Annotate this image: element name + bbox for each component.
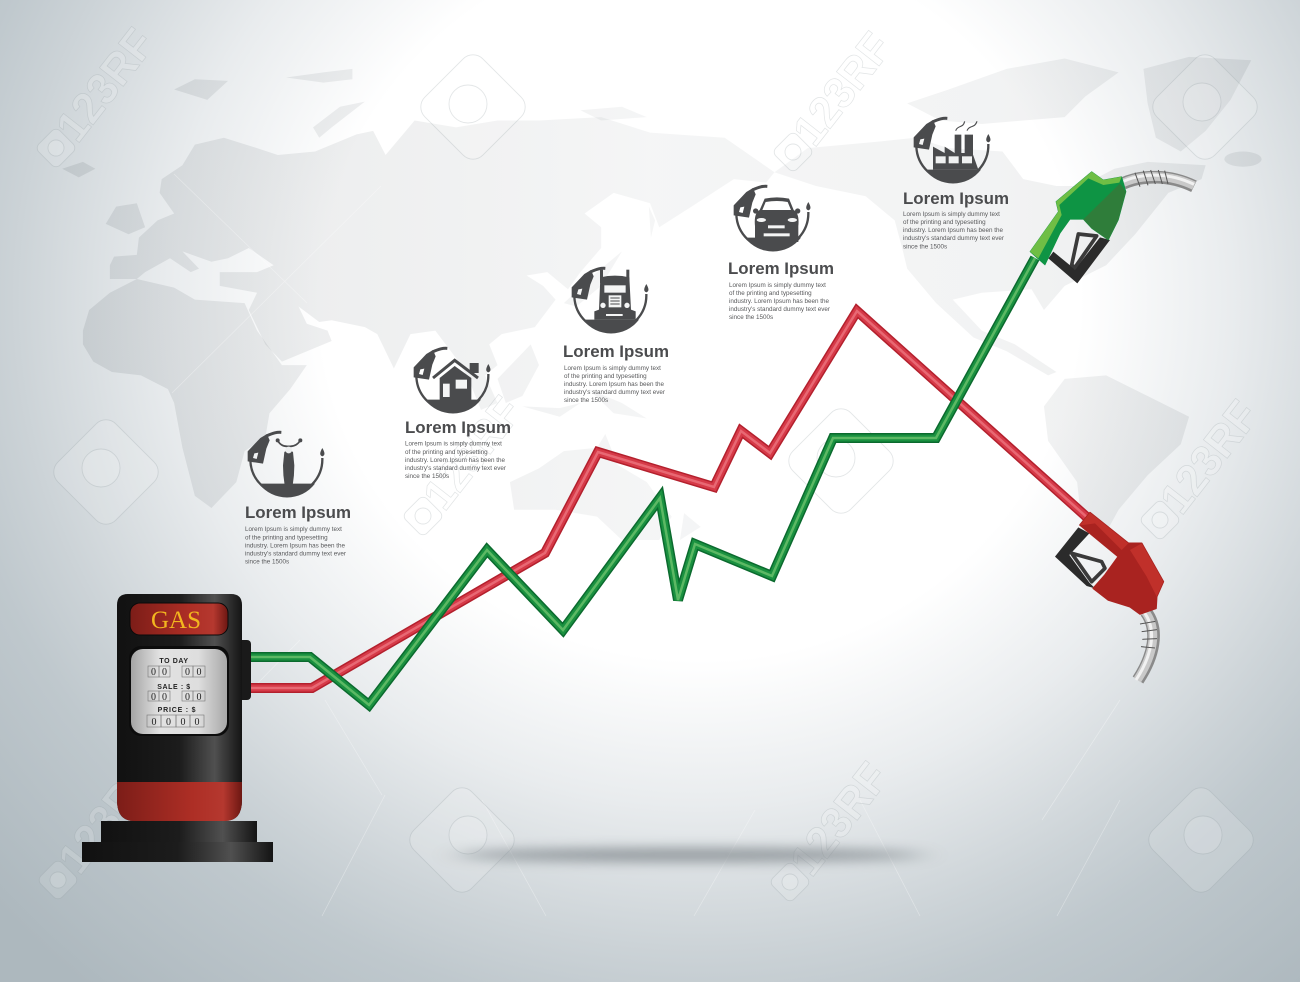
green nozzle highlight <box>1030 172 1122 258</box>
body text: industry. Lorem Ipsum has been the <box>245 542 345 550</box>
pump red band <box>117 782 242 821</box>
map: Eurasia <box>110 117 774 410</box>
watermark: 123RF logos: 123RF <box>784 24 901 155</box>
map: Australia <box>510 434 701 540</box>
map: islands of the old world <box>62 69 655 418</box>
display panel: SALE : $ <box>157 684 191 691</box>
green nozzle trigger guard <box>1048 234 1110 283</box>
body text: Lorem Ipsum is simply dummy text <box>729 282 826 289</box>
step 1: motorcycle <box>245 432 351 566</box>
step 5: factory <box>903 118 1009 250</box>
icon: house <box>414 348 490 413</box>
floor shadow <box>455 848 925 862</box>
display panel <box>129 646 229 736</box>
green nozzle body <box>1030 172 1126 265</box>
display panel: 0 <box>162 692 167 703</box>
display panel: 0 <box>194 717 200 728</box>
icon: motorcycle <box>248 432 324 497</box>
display panel: 0 <box>151 692 156 703</box>
map: Africa <box>83 279 307 508</box>
heading: Lorem Ipsum <box>903 190 1009 208</box>
display panel: 0 <box>185 667 190 678</box>
body text: industry's standard dummy text ever <box>245 550 346 558</box>
heading: Lorem Ipsum <box>563 343 669 361</box>
watermark: 123RF logos: 123RF <box>49 752 166 883</box>
body text: since the 1500s <box>903 244 947 250</box>
body text: Lorem Ipsum is simply dummy text <box>564 365 661 372</box>
world map <box>62 57 1262 540</box>
red nozzle body <box>1080 513 1163 614</box>
display panel: TO DAY <box>159 658 189 665</box>
step 3: truck <box>563 268 669 404</box>
red nozzle spout <box>1136 612 1157 680</box>
body text: industry's standard dummy text ever <box>405 465 506 472</box>
icon: truck <box>572 268 648 333</box>
body text: since the 1500s <box>245 558 289 566</box>
icon: factory <box>914 118 990 183</box>
body text: Lorem Ipsum is simply dummy text <box>903 211 1000 218</box>
body text: industry's standard dummy text ever <box>903 235 1004 242</box>
gas sign <box>130 603 228 635</box>
body text: of the printing and typesetting <box>729 290 812 297</box>
pump base <box>82 821 273 862</box>
gas sign: GAS <box>151 607 201 634</box>
icon: car <box>734 186 810 251</box>
pump connector <box>238 640 251 700</box>
pump body <box>117 594 242 821</box>
watermark: 123RF logos: 123RF <box>414 388 531 519</box>
step 4: car <box>728 186 834 321</box>
body text: industry's standard dummy text ever <box>729 306 830 313</box>
display panel: PRICE : $ <box>158 707 196 714</box>
green nozzle spout <box>1123 170 1194 187</box>
body text: since the 1500s <box>564 397 608 404</box>
body text: industry. Lorem Ipsum has been the <box>903 227 1003 234</box>
display panel: 0 <box>152 717 156 728</box>
body text: industry's standard dummy text ever <box>564 389 665 396</box>
display panel: 0 <box>166 717 171 728</box>
heading: Lorem Ipsum <box>405 419 511 437</box>
red price line <box>250 311 1090 688</box>
map: Americas and Greenland <box>774 57 1262 540</box>
display panel: 0 <box>196 692 202 703</box>
display panel: 0 <box>196 667 202 678</box>
watermark: 123RF logos: 123RF <box>1151 392 1268 523</box>
gas pump <box>82 594 273 862</box>
body text: of the printing and typesetting <box>903 219 986 226</box>
watermark: 123RF logos: 123RF <box>47 20 164 151</box>
body text: industry. Lorem Ipsum has been the <box>564 381 664 388</box>
body text: industry. Lorem Ipsum has been the <box>729 298 829 305</box>
red nozzle trigger guard <box>1055 527 1105 588</box>
body text: Lorem Ipsum is simply dummy text <box>245 526 342 533</box>
display panel: 0 <box>151 667 156 678</box>
heading: Lorem Ipsum <box>245 504 351 522</box>
display panel: 0 <box>185 692 190 703</box>
step 2: house <box>405 348 511 480</box>
green nozzle shade <box>1083 183 1126 240</box>
display panel: 0 <box>162 667 167 678</box>
red nozzle <box>1055 513 1163 680</box>
green nozzle <box>1030 170 1194 283</box>
body text: industry. Lorem Ipsum has been the <box>405 457 505 464</box>
red nozzle highlight <box>1080 513 1163 597</box>
body text: since the 1500s <box>729 314 773 321</box>
heading: Lorem Ipsum <box>728 260 834 278</box>
body text: of the printing and typesetting <box>405 449 488 456</box>
green price line <box>250 258 1035 705</box>
body text: Lorem Ipsum is simply dummy text <box>405 440 502 448</box>
body text: since the 1500s <box>405 473 449 480</box>
body text: of the printing and typesetting <box>564 373 647 380</box>
watermark hairlines <box>170 174 1120 916</box>
display panel: 0 <box>180 717 186 728</box>
body text: of the printing and typesetting <box>245 534 328 542</box>
watermark: 123RF logos: 123RF <box>781 754 898 885</box>
